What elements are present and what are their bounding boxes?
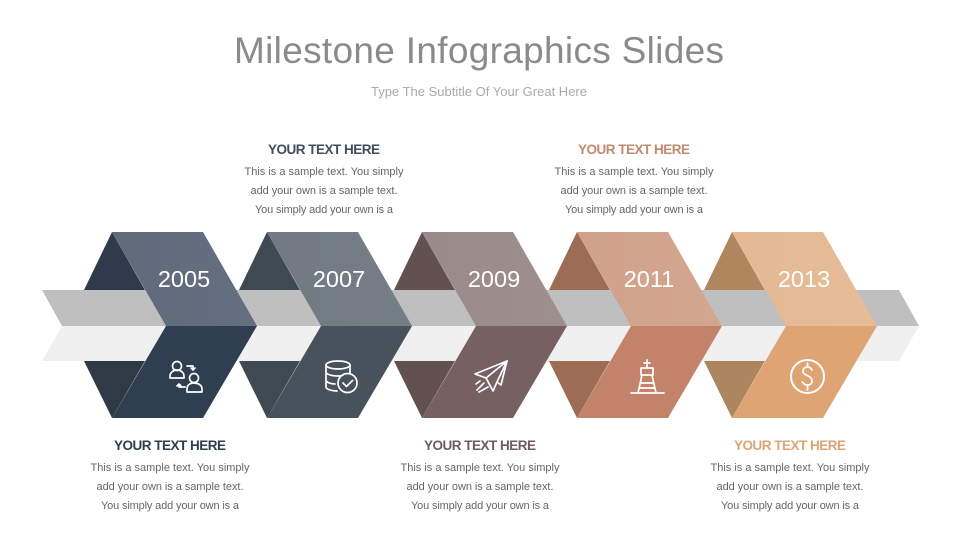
text block: 2013 bottom: YOUR TEXT HERE: [734, 438, 846, 453]
text block: 2013 bottom: add your own is a sample text.: [716, 481, 864, 493]
text block: 2013 bottom: This is a sample text. You simply: [710, 462, 870, 474]
text block: 2009 bottom: YOUR TEXT HERE: [424, 438, 536, 453]
icon: people exchange: [170, 362, 202, 392]
text block: 2007 top: YOUR TEXT HERE: [268, 142, 380, 157]
milestone 2011: [549, 232, 722, 418]
text block: 2011 top: add your own is a sample text.: [560, 185, 708, 197]
text block: 2005 bottom: add your own is a sample text.: [96, 481, 244, 493]
year 2011: 2011: [624, 266, 674, 292]
icon: paper plane: [475, 361, 507, 392]
text block: 2007 top: You simply add your own is a: [255, 204, 394, 216]
text block: 2011 top: This is a sample text. You simply: [554, 166, 714, 178]
year 2007: 2007: [313, 266, 365, 292]
icon: dollar coin: [791, 360, 824, 393]
icon: chess king: [631, 360, 664, 393]
text block: 2011 top: You simply add your own is a: [565, 204, 704, 216]
text block: 2005 bottom: [90, 438, 250, 512]
milestone 2009: [394, 232, 567, 418]
text block: 2011 top: [554, 142, 714, 216]
text block: 2009 bottom: This is a sample text. You simply: [400, 462, 560, 474]
arrow band: timeline: [42, 290, 919, 361]
text block: 2007 top: [244, 142, 404, 216]
text block: 2005 bottom: YOUR TEXT HERE: [114, 438, 226, 453]
text block: 2013 bottom: You simply add your own is a: [721, 500, 860, 512]
text block: 2009 bottom: You simply add your own is a: [411, 500, 550, 512]
subtitle: Type The Subtitle Of Your Great Here: [371, 84, 587, 99]
text block: 2007 top: This is a sample text. You simply: [244, 166, 404, 178]
year 2009: 2009: [468, 266, 520, 292]
text block: 2011 top: YOUR TEXT HERE: [578, 142, 690, 157]
title: Milestone Infographics Slides: [234, 30, 724, 71]
text block: 2005 bottom: You simply add your own is a: [101, 500, 240, 512]
year 2005: 2005: [158, 266, 210, 292]
milestone 2007: [239, 232, 412, 418]
text block: 2013 bottom: [710, 438, 870, 512]
milestone 2013: [704, 232, 877, 418]
text block: 2005 bottom: This is a sample text. You simply: [90, 462, 250, 474]
icon: database check: [326, 361, 357, 392]
milestone 2005: [84, 232, 257, 418]
text block: 2009 bottom: add your own is a sample text.: [406, 481, 554, 493]
year 2013: 2013: [778, 266, 830, 292]
text block: 2007 top: add your own is a sample text.: [250, 185, 398, 197]
text block: 2009 bottom: [400, 438, 560, 512]
